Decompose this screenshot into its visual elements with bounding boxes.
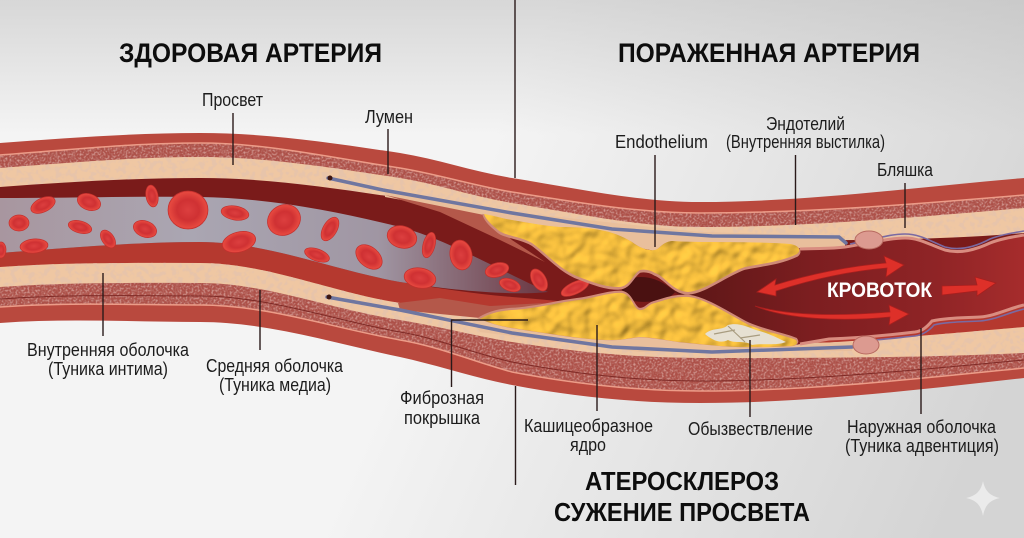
lower wall: adventitia [0, 304, 1024, 538]
blood flow arrows [755, 256, 996, 325]
plaque: upper [484, 214, 799, 294]
pink nodules [853, 231, 883, 354]
callout: fibrous cap: Фиброзная [400, 388, 484, 408]
callout: necrotic core: Кашицеобразное [524, 416, 653, 436]
healthy lumen [0, 197, 548, 293]
bottom title: СУЖЕНИЕ ПРОСВЕТА [554, 497, 810, 527]
bottom title: АТЕРОСКЛЕРОЗ [585, 466, 779, 496]
lower wall: intima tan layer [0, 263, 1024, 538]
lower red lining [0, 242, 1024, 538]
heading: affected artery: ПОРАЖЕННАЯ АРТЕРИЯ [618, 38, 920, 68]
label: blood flow: КРОВОТОК [827, 279, 932, 302]
callout: tunica media [206, 290, 344, 395]
callout: calcification: Обызвествление [688, 419, 813, 439]
callout: tunica adventitia [845, 328, 999, 456]
lumen edge lining [800, 231, 1024, 344]
callout: necrotic core [524, 325, 653, 455]
stenosis gap [622, 277, 675, 302]
bottom title [554, 466, 810, 527]
diseased lumen [670, 235, 1024, 345]
callout: lumen (Просвет): Просвет [202, 90, 263, 110]
callout: tunica adventitia: Наружная оболочка [847, 417, 997, 437]
callout: endothelium lining: Эндотелий [766, 114, 845, 134]
callout: tunica intima [27, 273, 190, 379]
upper wall: adventitia [0, 133, 1024, 538]
upper wall: intima tan layer [0, 157, 1024, 538]
callout: endothelium [615, 132, 708, 247]
heading: healthy artery: ЗДОРОВАЯ АРТЕРИЯ [119, 38, 382, 68]
callout: tunica intima: (Туника интима) [48, 359, 168, 379]
upper wall: media band [0, 143, 1024, 538]
callout: endothelium lining: (Внутренняя выстилка) [726, 132, 885, 152]
calcification [705, 324, 786, 345]
callout: tunica media: (Туника медиа) [219, 375, 331, 395]
red blood cells [0, 184, 591, 300]
endothelium blue lines [326, 176, 852, 352]
icon: sparkle [966, 481, 1000, 516]
callout: plaque: Бляшка [877, 160, 934, 180]
callout: fibrous cap [400, 320, 528, 428]
lower wall: media band [0, 283, 1024, 538]
upper dark lumen lining [0, 178, 1024, 538]
callout: endothelium lining [726, 114, 885, 225]
page below artery [0, 320, 1024, 538]
callout: lumen (Просвет) [202, 90, 263, 165]
callout: fibrous cap: покрышка [404, 408, 481, 428]
callout: calcification [688, 340, 813, 439]
callout: tunica adventitia: (Туника адвентиция) [845, 436, 999, 456]
artery illustration [0, 133, 1024, 538]
callout: lumen (Лумен): Лумен [365, 107, 413, 127]
callout: plaque [877, 160, 934, 228]
divider [514, 0, 516, 485]
callout: necrotic core: ядро [570, 435, 606, 455]
callout: tunica media: Средняя оболочка [206, 356, 344, 376]
tan patches behind plaque [385, 190, 852, 352]
fibrous wedges [385, 195, 545, 318]
callout: tunica intima: Внутренняя оболочка [27, 340, 190, 360]
plaque: lower [480, 292, 797, 347]
callout: endothelium: Endothelium [615, 132, 708, 152]
callout: lumen (Лумен) [365, 107, 413, 174]
